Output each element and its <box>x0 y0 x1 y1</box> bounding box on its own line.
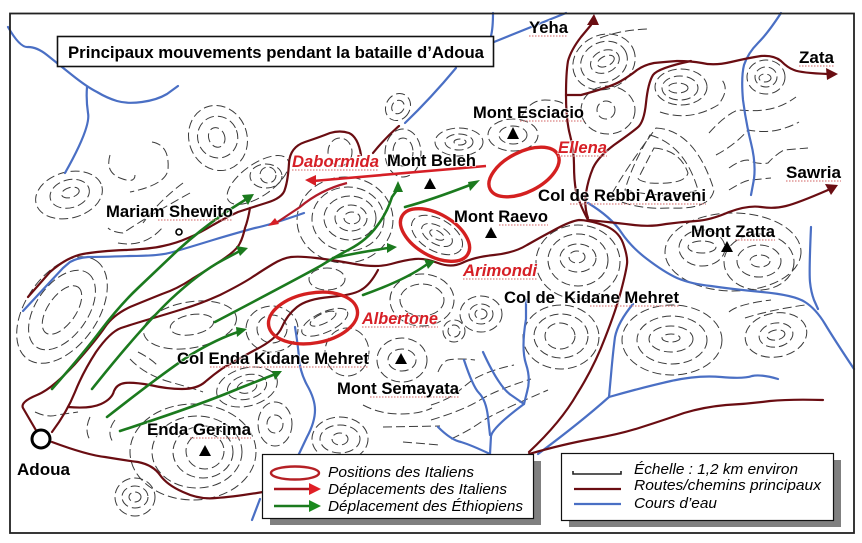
map labels: Albertone <box>361 310 438 328</box>
legend: scale, roads and rivers <box>562 454 841 527</box>
map labels: Dabormida <box>292 153 379 171</box>
legend: movements and positions: Déplacements des Italiens <box>328 481 507 498</box>
map labels: Mont Zatta <box>691 223 776 241</box>
map labels: Mont Semayata <box>337 380 460 398</box>
map labels: Enda Gerima <box>147 421 252 439</box>
spell-check underlines <box>158 36 841 438</box>
map labels: Mont Raevo <box>454 208 548 226</box>
map labels: Mont Beleh <box>387 152 476 170</box>
map labels: Col de Rebbi Araveni <box>538 187 706 205</box>
legend: scale, roads and rivers: Échelle : 1,2 km environ <box>634 461 798 478</box>
map labels: Col Enda Kidane Mehret <box>177 350 370 368</box>
Mariam Shewito marker <box>176 229 182 235</box>
title: Principaux mouvements pendant la bataille d’Adoua <box>68 43 485 62</box>
legend: movements and positions: Positions des Italiens <box>328 464 475 481</box>
legend: movements and positions <box>262 454 541 525</box>
legend: movements and positions: Déplacement des Éthiopiens <box>328 498 524 515</box>
map labels: Arimondi <box>462 262 537 280</box>
legend: scale, roads and rivers: Cours d’eau <box>634 495 718 512</box>
map labels: Mariam Shewito <box>106 203 233 221</box>
Italian movements (red arrows) <box>268 166 486 226</box>
map labels: Adoua <box>17 461 71 479</box>
Italian positions (red ellipses) <box>264 137 567 350</box>
map labels: Zata <box>799 49 835 67</box>
legend: scale, roads and rivers: Routes/chemins principaux <box>634 477 822 494</box>
map labels: Mont Esciacio <box>473 104 584 122</box>
map labels: Sawria <box>786 164 842 182</box>
Ethiopian movements (green arrows) <box>52 180 480 431</box>
title <box>58 36 494 66</box>
map labels: Ellena <box>558 139 607 157</box>
Adoua town marker <box>32 430 50 448</box>
map labels: Col de Kidane Mehret <box>504 289 680 307</box>
mountains <box>199 127 733 456</box>
map labels: Yeha <box>529 19 569 37</box>
